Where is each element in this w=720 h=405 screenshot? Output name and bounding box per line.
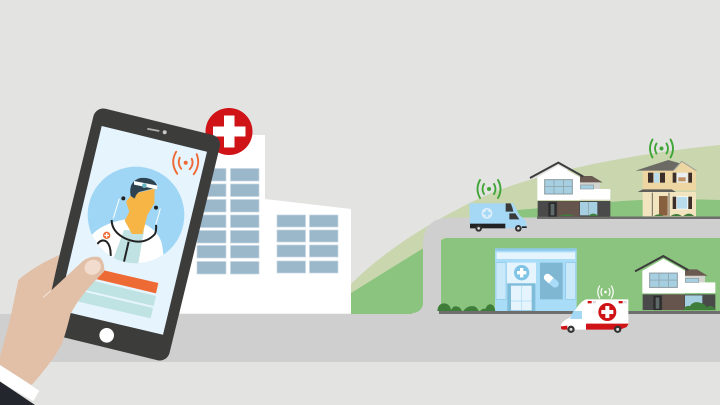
hills [351, 145, 720, 320]
pharmacy [495, 248, 577, 311]
home button [99, 328, 114, 343]
house one [530, 163, 610, 217]
ambulance [561, 299, 629, 333]
icon: hospital red cross [206, 108, 252, 155]
delivery van [469, 203, 527, 232]
doctor portrait [87, 167, 184, 267]
record bars [78, 269, 158, 318]
shirt cuff [0, 365, 39, 401]
icon: van signal [478, 180, 500, 198]
suit sleeve [0, 382, 35, 405]
icon: ambulance signal [598, 286, 613, 298]
hospital [180, 135, 351, 314]
icon: house signal [650, 140, 673, 158]
hospital windows [197, 168, 338, 274]
green panel [441, 238, 720, 312]
phone screen [58, 126, 207, 335]
ground strips [439, 216, 720, 314]
icon: phone signal [173, 152, 198, 174]
road [0, 218, 720, 362]
hand [0, 255, 104, 385]
speaker and camera [147, 129, 167, 134]
house two [636, 160, 696, 216]
connected healthcare scene [0, 108, 720, 405]
phone [41, 106, 222, 363]
house three [635, 256, 716, 310]
bushes by pharmacy [437, 303, 495, 311]
